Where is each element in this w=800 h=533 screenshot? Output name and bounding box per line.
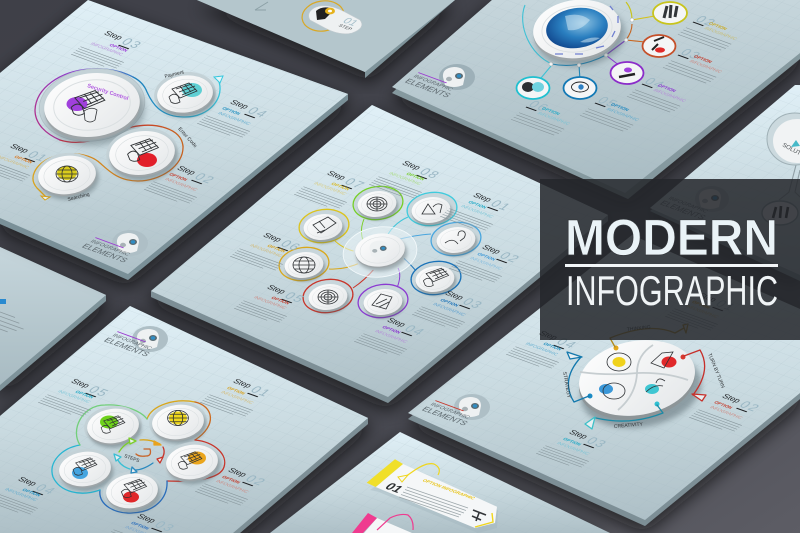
step 03 [104,509,181,533]
pink ribbon [352,513,413,533]
disc: 03 [101,468,163,516]
step 03 [71,26,148,70]
step 05: 05 [281,290,309,305]
step 02: INFOGRAPHIC [214,479,250,495]
option 03: INFOGRAPHIC [687,59,724,75]
disc: enter code [103,124,198,185]
step 05 [38,374,115,418]
arrow: thinking [610,324,688,350]
step 03: INFOGRAPHIC [555,441,591,457]
step 06 [230,228,307,272]
step 05: Step [69,378,92,389]
solution rails [779,165,800,200]
ribbon card: 01 [382,480,407,495]
option 06 [511,98,582,136]
logo [403,64,475,99]
logo: INFOGRAPHIC [88,239,131,257]
wheel disc [573,331,707,437]
panel: far left plate [0,247,106,391]
disc: security control [35,63,149,151]
step 05 [234,280,311,324]
logo: INFOGRAPHIC [411,74,454,92]
step 08 [369,156,446,200]
step 05: Step [265,284,288,295]
step 05: 05 [85,384,113,399]
option 05: OPTION [610,102,631,112]
option 05 [580,94,651,132]
disc: 04 [54,446,116,494]
connectors [329,217,431,288]
option 06: INFOGRAPHIC [535,111,572,127]
arrow head [214,76,223,83]
step 07 [294,166,371,210]
step 08: INFOGRAPHIC [387,171,423,187]
step 05: OPTION [270,296,291,305]
step 04: INFOGRAPHIC [216,111,252,127]
arrow: creativity [585,402,663,429]
step 04 [506,326,583,370]
dark node [762,201,798,225]
step 07: 07 [341,176,369,191]
option 02: INFOGRAPHIC [702,26,739,42]
step 03: OPTION [108,43,129,53]
step 01: INFOGRAPHIC [459,204,495,220]
step 02: Step [480,244,503,255]
option pill with head icon [300,0,362,34]
step 03: OPTION [130,521,151,531]
logo: ELEMENTS [80,242,131,264]
step 07: OPTION [330,182,351,191]
option 04 [627,75,698,113]
step 04: Step [385,317,408,328]
step 04: OPTION [21,488,42,497]
step 02: OPTION [168,172,189,182]
step 04: 04 [401,323,429,338]
step 03: OPTION [439,298,460,308]
step 03: 03 [459,296,487,311]
step 05: OPTION [74,390,95,399]
step 01: Step [8,143,31,154]
option 04: OPTION [657,83,678,93]
step 06: OPTION [266,244,287,253]
option 04: 04 [641,75,669,91]
step 01: OPTION [467,200,488,210]
step 04: OPTION [221,106,242,116]
icon: small triangle [255,2,268,10]
option ring 01 [405,190,459,229]
step 04: INFOGRAPHIC [523,342,560,357]
option 06: OPTION [541,106,562,116]
panel: globe plate [392,0,800,199]
step 03: Step [135,513,158,524]
option 02 [678,13,749,51]
step 04: 04 [553,336,581,351]
step 08: 08 [416,166,444,181]
disc: payment: Payment [164,69,185,80]
step 02 [449,240,526,284]
title panel [540,179,800,340]
panel: plate with security steps [0,0,348,280]
step 01: 01 [487,198,515,213]
ribbon card [367,459,498,533]
five steps cycle: STEPS [123,453,140,464]
step 03: Step [102,30,125,41]
option 03: 03 [677,46,705,62]
panel: wheel plate: TURN BY TURN [706,353,726,389]
connector line [33,69,220,197]
step 01 [665,288,742,332]
ribbon card: OPTION INFOGRAPHIC [420,478,477,501]
step 03: 03 [583,435,611,450]
option ring 06 [277,245,331,284]
disc: 01 [147,399,209,447]
arrow: strategy [567,352,592,402]
step 07: INFOGRAPHIC [312,181,348,197]
logo: INFOGRAPHIC [428,402,471,420]
logo [420,394,490,427]
step 01: 01 [24,149,52,164]
step 03: Step [567,429,590,440]
option ring 04 [356,282,410,321]
step 02 [689,389,766,433]
step 01 [0,139,54,183]
panel: wheel plate: CREATIVITY [614,421,644,430]
step 01: OPTION [226,386,247,396]
step 02: 02 [242,473,270,488]
option ring 08 [351,184,405,223]
step 04: OPTION [381,325,402,335]
step 02: OPTION [713,400,734,410]
disc: enter code: Enter Code [177,126,198,149]
step 03: OPTION [562,437,583,447]
step 05: INFOGRAPHIC [56,389,92,405]
logo: INFOGRAPHIC [666,196,709,214]
step 01 [200,374,277,418]
logo [658,186,729,221]
step 01: Step [471,192,494,203]
step 02 [144,161,221,205]
step 04: Step [16,476,39,487]
logo [80,230,148,264]
step 03: Step [443,290,466,301]
ring connector [523,2,655,84]
step 02: INFOGRAPHIC [468,256,504,272]
step 04 [0,472,62,516]
step 02: INFOGRAPHIC [708,405,744,421]
step 02: Step [175,165,198,176]
step 07: Step [325,170,348,181]
disc: security control: Security Control [86,83,129,102]
option 04: INFOGRAPHIC [651,88,688,104]
step 08: OPTION [405,172,426,181]
logo: ELEMENTS [403,77,454,99]
node dots [549,18,634,67]
step 04: 04 [244,105,272,120]
option ring 02 [429,220,483,259]
disc: 02 [161,439,223,487]
panel: right plate behind the title [650,85,800,281]
solution disc [767,113,800,165]
option 05: INFOGRAPHIC [604,107,641,123]
option 02: 02 [692,13,720,29]
heading: modern: MODERN [565,209,778,266]
step 04: INFOGRAPHIC [373,329,409,345]
step 01: 01 [247,384,275,399]
step 02: Step [226,467,249,478]
hub [340,223,420,281]
option 05: 05 [594,94,622,110]
step 04 [354,313,431,357]
step 02: Step [720,393,743,404]
option 06: 06 [525,98,553,114]
step 03 [536,425,613,469]
step 02: INFOGRAPHIC [163,177,199,193]
step 08: Step [400,160,423,171]
option ring 07 [297,207,351,246]
logo: ELEMENTS [420,405,471,427]
disc: 05 [82,403,144,451]
disc: globe [530,0,629,71]
step 03: INFOGRAPHIC [88,42,125,57]
disc: searching [33,149,101,203]
step 03: INFOGRAPHIC [431,302,467,318]
step 02: 02 [496,250,524,265]
logo [102,326,168,358]
step 01: OPTION [691,300,712,310]
step 05: INFOGRAPHIC [252,295,288,311]
logo: ELEMENTS [658,199,709,221]
step 02: OPTION [476,252,497,262]
step 03: 03 [118,36,146,51]
step 04: Step [228,99,251,110]
step 04 [197,95,274,139]
step 06: 06 [277,238,305,253]
step 01: Step [231,378,254,389]
option ring 05 [301,277,355,316]
step 03 [412,286,489,330]
curved arrow [402,464,439,479]
clover outline [52,401,225,513]
option 02: OPTION [708,21,729,31]
step 02: 02 [736,399,764,414]
step 04: Step [537,330,560,341]
panel: centre plate [151,105,608,403]
step 06: INFOGRAPHIC [248,243,284,259]
step 04: 04 [32,482,60,497]
option circles [516,2,687,99]
step 06: Step [261,232,284,243]
step 02 [195,463,272,507]
step 01: Step [696,292,719,303]
panel: wheel plate: STRATEGY [561,371,572,399]
panel: bottom ribbon plate [270,432,610,533]
option 03 [663,46,734,84]
step 02: OPTION [221,475,242,485]
arrow: turn by turn [680,350,706,401]
step 02: 02 [191,171,219,186]
logo: INFOGRAPHIC [110,333,153,351]
wheel labels: THINKING [627,325,651,333]
option pill with head icon: STEP [336,23,354,32]
step 04: OPTION [542,342,563,351]
step 01: INFOGRAPHIC [219,390,255,406]
option pill with head icon: 01 [340,16,360,28]
five steps cycle [114,438,164,473]
step 04: INFOGRAPHIC [3,487,39,503]
panel: five-step plate [0,306,368,533]
step 01: INFOGRAPHIC [684,304,720,320]
step 01: 01 [712,298,740,313]
option ring 03 [409,259,463,298]
panel: top small plate [197,0,455,78]
step 01: OPTION [13,155,34,164]
disc: searching: Searching [67,192,91,203]
panel: wheel plate [408,235,800,526]
option 03: OPTION [693,54,714,64]
disc: payment [152,68,218,121]
logo: ELEMENTS [102,336,153,358]
step 01 [440,188,517,232]
